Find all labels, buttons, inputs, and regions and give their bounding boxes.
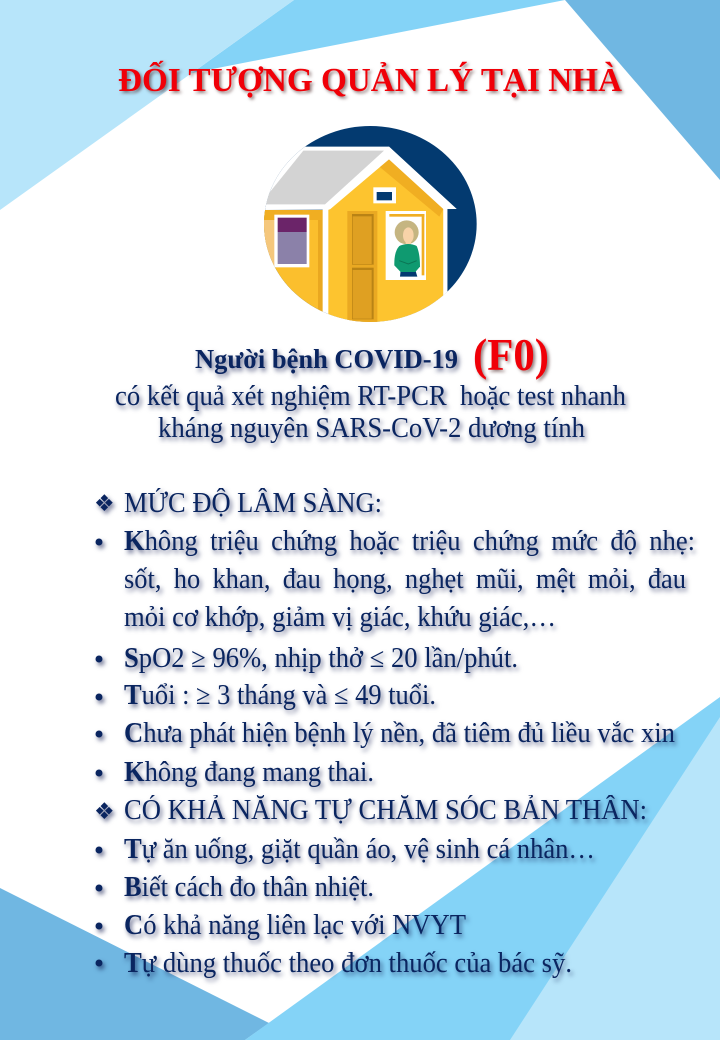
section heading: self care: ❖ [94,799,115,825]
description text [115,381,626,444]
icon part: door [347,211,377,323]
bullet: symptoms: Không triệu chứng hoặc triệu chứng mức độ nhẹ: [124,526,695,557]
description text: kháng nguyên SARS-CoV-2 dương tính [158,413,585,444]
icon: house with person in window [260,123,480,327]
bullet: daily activities: Tự ăn uống, giặt quần áo, vệ sinh cá nhân… [124,834,595,865]
bullet: pregnancy: Không đang mang thai. [124,757,374,788]
bullet: SpO2: SpO2 ≥ 96%, nhịp thở ≤ 20 lần/phút. [124,643,518,674]
icon part: person [395,220,419,244]
bullet: symptoms: mỏi cơ khớp, giảm vị giác, khứu giác,… [124,602,556,633]
icon part: left wall [264,210,324,312]
icon part: attic window [373,187,396,203]
bullet: medication: Tự dùng thuốc theo đơn thuốc của bác sỹ. [124,948,572,979]
title: ĐỐI TƯỢNG QUẢN LÝ TẠI NHÀ [118,60,622,99]
description text: có kết quả xét nghiệm RT-PCR hoặc test nhanh [115,381,626,412]
section heading: clinical level: ❖ [94,491,115,517]
section heading: self care: CÓ KHẢ NĂNG TỰ CHĂM SÓC BẢN THÂN: [124,795,647,826]
bullet: symptoms: sốt, ho khan, đau họng, nghẹt mũi, mệt mỏi, đau [124,564,686,595]
bullet: age: Tuổi : ≥ 3 tháng và ≤ 49 tuổi. [124,680,436,711]
icon part: front wall [322,209,448,322]
background: bottom corner shapes [0,697,720,1040]
icon part: roof [260,147,457,210]
subtitle: F0 label: (F0) [473,329,549,380]
bullet: medical history: Chưa phát hiện bệnh lý nền, đã tiêm đủ liều vắc xin [124,718,675,749]
section heading: clinical level: MỨC ĐỘ LÂM SÀNG: [124,488,382,519]
bullet: symptoms [96,526,695,633]
background: top corner shapes [0,0,720,210]
icon part: left window [274,215,309,267]
bullet: contact: Có khả năng liên lạc với NVYT [124,910,466,941]
bullet: temperature: Biết cách đo thân nhiệt. [124,872,374,903]
subtitle: patient group: Người bệnh COVID-19 [195,344,458,374]
icon part: person window [386,211,426,280]
